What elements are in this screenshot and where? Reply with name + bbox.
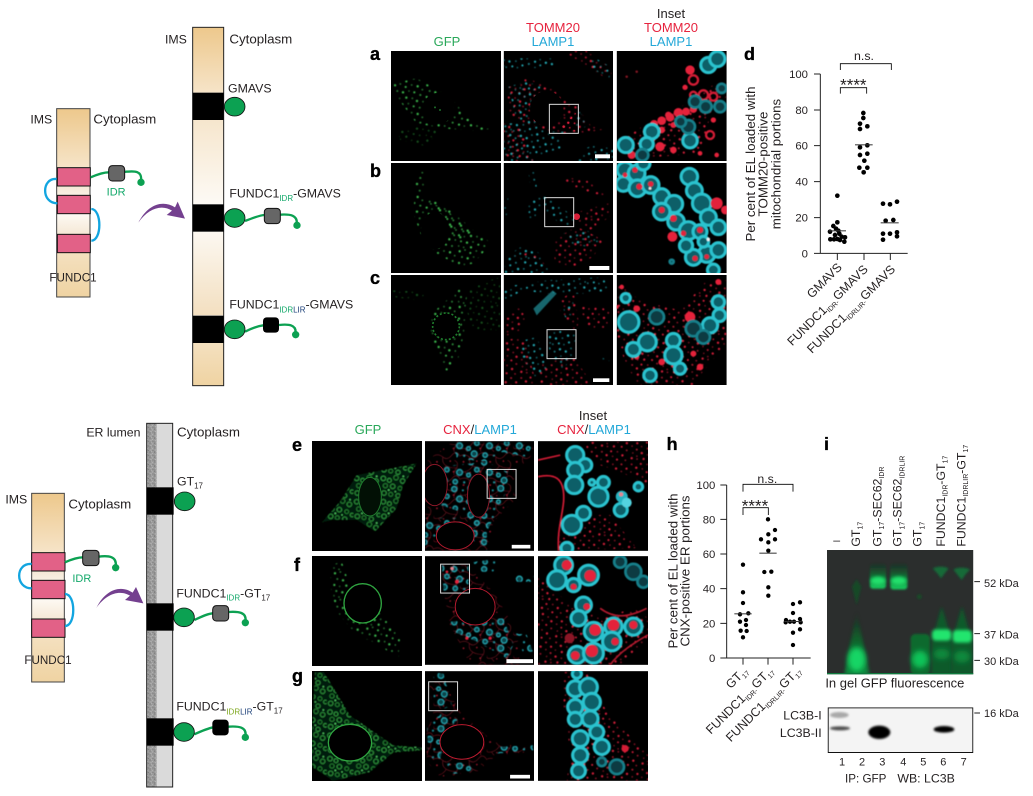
lane labels: IDRLIR [899,456,906,479]
blot caption [845,771,955,785]
schematic: GT17 constructs on ER membrane: 17 [274,707,283,716]
schematic: FUNDC1 in mitochondrial membrane: IMS [30,113,52,127]
x tick labels: IDRLIR- [846,299,869,322]
schematic: GMAVS constructs on mitochondrial membrane: LIR [293,306,306,315]
size markers: 30 kDa [984,656,1020,668]
x tick labels: FUNDC1 [785,303,830,348]
lane numbers [839,757,967,769]
panel i: gel and western blot [780,434,1020,785]
x tick labels: GMAVS [830,262,871,303]
y tick labels: 40 [703,584,715,596]
schematic: GT17 constructs on ER membrane: Cytoplasm [177,425,240,440]
lane labels: -GT [954,452,968,474]
y tick labels: 0 [802,248,808,260]
schematic: GT17 constructs on ER membrane: GT [177,474,194,488]
arrow: purple curved arrow [138,202,185,223]
label: d: d [744,44,755,64]
blot band labels: LC3B-I [783,709,822,723]
lane labels: IDRLIR [963,474,970,497]
blot caption: WB: LC3B [897,771,955,785]
micrograph: c GFP [391,275,501,385]
label: a: a [370,44,381,64]
schematic: GT17 constructs on ER membrane: FUNDC1 [176,700,226,714]
schematic: GT17 constructs on ER membrane: IDR [226,594,240,603]
micrograph: c inset [616,275,727,385]
y tick labels: 80 [795,105,808,117]
gel image: in-gel GFP fluorescence [827,550,974,674]
lane numbers: 1 [839,757,845,769]
y tick labels [789,69,808,260]
schematic: GT17 constructs on ER membrane: -GT [240,586,262,600]
panel: bottom microscopy e-g headers: CNX/LAMP1 [443,422,517,437]
panel: top schematics [30,27,353,386]
lane labels: 17 [943,456,950,463]
x tick labels: 17 [795,670,805,680]
lane labels [833,445,970,547]
label: g: g [292,666,303,686]
x tick labels: FUNDC1 [804,311,849,356]
x tick labels: 17 [741,670,752,680]
x tick labels: IDR- [826,299,842,314]
schematic: GT17 constructs on ER membrane: LIR [240,708,253,717]
label: f: f [294,555,301,575]
x tick labels [703,664,805,746]
chart d: EL loaded with mitochondrial portions [743,44,908,357]
y axis title: CNX-positive ER portions [678,495,693,647]
lane labels: 17 [919,522,926,530]
blot band labels: LC3B-II [780,726,822,740]
lane labels: FUNDC1 [954,497,968,547]
lane labels: GT [849,530,863,547]
size markers: 16 kDa [984,708,1020,720]
micrograph: e GFP [312,441,422,551]
schematic: FUNDC1 in mitochondrial membrane: Cytoplasm [93,112,156,127]
lane labels: IDR [879,467,886,479]
x tick labels: GMAVS [857,262,898,303]
data points FUNDC1 IDR-GMAVS [855,111,873,175]
micrograph: f GFP [312,556,422,666]
x tick labels: GT [723,669,745,691]
blot band labels [780,709,822,740]
x tick labels: GT [749,669,771,691]
lane labels: -SEC62 [870,478,884,522]
lane labels: -SEC62 [891,478,905,522]
axes and ticks [720,485,811,665]
lane labels: 17 [899,522,906,530]
lane numbers: 5 [920,757,926,769]
schematic: GMAVS constructs on mitochondrial membrane: FUNDC1 [229,187,279,201]
micrograph: g GFP [312,671,422,781]
lane labels: FUNDC1 [934,497,948,547]
schematic: FUNDC1 in mitochondrial membrane: IDR [107,187,126,199]
micrograph: e inset [538,441,648,551]
lane labels: GT [891,530,905,547]
y tick labels: 20 [703,618,715,630]
lane labels: 17 [879,522,886,530]
size markers: 52 kDa [984,578,1020,590]
lane numbers: 3 [879,757,885,769]
lane labels: GT [911,530,925,547]
significance brackets: **** [840,75,867,94]
schematic: GT17 constructs on ER membrane: -GT [253,700,274,714]
schematic: GT17 constructs on ER membrane: 17 [194,481,204,490]
schematic: GMAVS constructs on mitochondrial membrane: IMS [165,33,187,47]
lane labels: – [833,533,840,547]
y tick labels: 100 [789,69,808,81]
lane labels: 17 [963,445,970,453]
lane labels: GT [870,530,884,547]
micrograph: b GFP [391,163,501,273]
panel: top microscopy a-c headers [434,6,698,49]
lane numbers: 7 [961,757,967,769]
micrograph: g inset [538,671,648,781]
micrograph: a GFP [391,51,501,161]
size markers: 37 kDa [984,629,1020,641]
schematic: FUNDC1 in membrane: Cytoplasm [68,497,131,512]
panel: top microscopy a-c headers: LAMP1 [650,34,692,49]
x tick labels [785,260,899,357]
lane numbers: 4 [900,757,906,769]
lane numbers: 2 [859,757,865,769]
label: b: b [370,161,381,181]
significance brackets: n.s. [757,472,777,486]
schematic: GMAVS constructs on mitochondrial membrane: IDR [279,306,293,315]
micrograph: e CNX LAMP1 [425,441,534,551]
schematic: GT17 constructs on ER membrane: FUNDC1 [176,586,226,600]
label: e: e [292,435,302,455]
micrograph: b inset [616,163,727,273]
schematic: FUNDC1 in membrane: IMS [5,493,27,507]
micrograph: c TOMM20 LAMP1 [504,275,613,385]
x tick labels: IDR- [745,687,760,703]
label: c: c [370,268,380,288]
y axis title: TOMM20-positive [756,112,771,216]
schematic: GT17 constructs on ER membrane [86,423,283,787]
panel: bottom microscopy e-g headers: Inset [579,408,607,423]
significance brackets: n.s. [854,49,874,63]
panel: bottom microscopy e-g headers [355,408,631,437]
panel: top microscopy a-c headers: Inset [657,6,685,21]
panel: top microscopy a-c headers: GFP [434,34,460,49]
y axis title: mitochondrial portions [768,98,783,229]
y tick labels: 60 [703,549,715,561]
panel: bottom microscopy e-g headers: CNX/LAMP1 [557,422,631,437]
data points FUNDC1 IDR LIR-GT17 [783,600,803,647]
schematic: FUNDC1 in mitochondrial membrane: FUNDC1 [49,272,97,285]
panel: bottom microscopy e-g headers: GFP [355,422,381,437]
y tick labels: 0 [709,653,715,665]
schematic: GMAVS constructs on mitochondrial membrane: IDR [279,194,293,203]
x tick labels: GT [776,669,799,691]
panel: top microscopy a-c headers: LAMP1 [532,34,574,49]
significance brackets [840,49,891,94]
micrograph: f inset [538,556,648,665]
schematic: FUNDC1 in membrane: FUNDC1 [24,654,72,667]
significance brackets [742,472,793,516]
gel caption: In gel GFP fluorescence [825,676,964,691]
lane labels: IDR [943,485,950,497]
micrograph: f CNX LAMP1 [425,556,534,665]
label: h: h [667,434,678,454]
significance brackets: **** [742,497,769,516]
schematic: FUNDC1 in membrane: IDR [72,573,91,585]
micrograph: a TOMM20 LAMP1 [504,51,613,161]
arrow: purple curved arrow [96,587,143,608]
data points GT17 [734,562,752,639]
micrograph: b TOMM20 LAMP1 [504,163,613,273]
schematic: FUNDC1 in membrane [5,493,131,682]
chart h: EL loaded with ER portions [666,434,811,746]
size markers [974,578,1020,720]
x tick labels: 17 [767,670,777,680]
western blot LC3B [828,707,974,753]
y axis title: Per cent of EL loaded with [743,86,758,242]
data points FUNDC1 IDR LIR-GMAVS [881,199,899,242]
y axis title [743,86,783,242]
panel: bottom schematics [5,423,283,787]
schematic: GMAVS constructs on mitochondrial membrane [165,27,353,386]
y tick labels [696,480,715,665]
data points FUNDC1 IDR-GT17 [759,517,777,598]
schematic: GMAVS constructs on mitochondrial membrane: GMAVS [228,82,272,96]
schematic: GMAVS constructs on mitochondrial membrane: FUNDC1 [229,298,279,312]
schematic: GT17 constructs on ER membrane: ER lumen [86,426,141,440]
schematic: GMAVS constructs on mitochondrial membrane: Cytoplasm [229,32,292,47]
micrograph: g CNX LAMP1 [425,671,534,781]
y tick labels: 60 [795,141,808,153]
panel: top microscopy a-c headers: TOMM20 [644,20,698,35]
blot caption: IP: GFP [845,772,887,785]
axes and ticks [814,74,908,260]
y tick labels: 40 [795,177,808,189]
micrograph: a inset [616,51,727,161]
schematic: GMAVS constructs on mitochondrial membrane: -GMAVS [306,298,353,312]
schematic: GT17 constructs on ER membrane: IDR [226,708,240,717]
y tick labels: 20 [795,213,808,225]
label: i: i [824,434,829,454]
y axis title: Per cent of EL loaded with [666,493,681,649]
x tick labels: FUNDC1 [703,692,748,737]
panel: top microscopy a-c headers: TOMM20 [526,20,580,35]
schematic: GT17 constructs on ER membrane: 17 [261,593,271,602]
y tick labels: 100 [696,480,715,492]
x tick labels: IDRLIR- [765,687,788,710]
lane labels: -GT [934,463,948,485]
data points GMAVS [828,193,847,244]
schematic: GMAVS constructs on mitochondrial membrane: -GMAVS [293,187,341,201]
x tick labels: GMAVS [804,260,845,301]
lane labels: 17 [858,522,865,530]
x tick labels: FUNDC1 [723,699,768,745]
lane numbers: 6 [940,757,946,769]
schematic: FUNDC1 in mitochondrial membrane [30,109,156,297]
y axis title [666,493,693,649]
y tick labels: 80 [703,514,715,526]
